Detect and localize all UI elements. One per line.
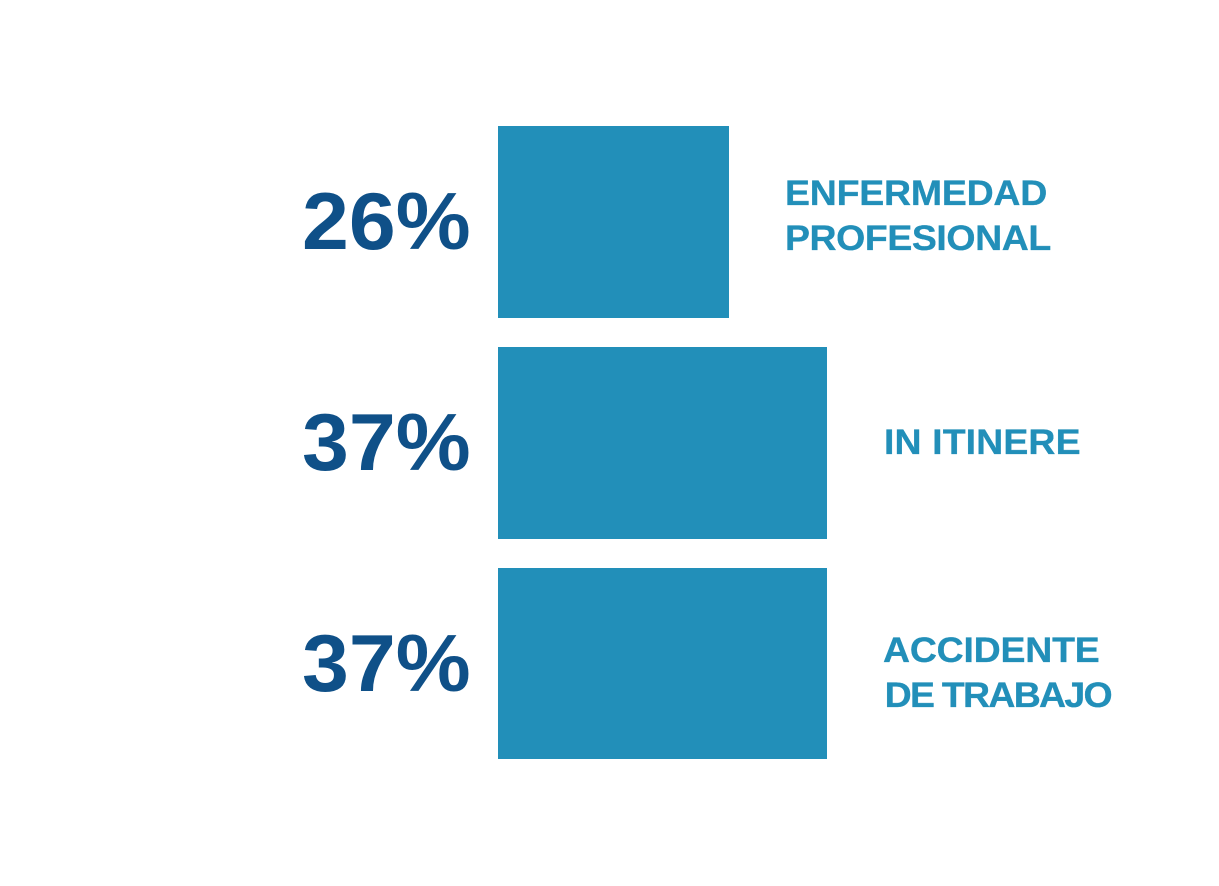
bar 37% accidente de trabajo	[498, 568, 827, 759]
row: accidente de trabajo	[302, 568, 1112, 759]
percentage 37% in itinere: 37%	[302, 398, 471, 488]
bar 37% in itinere	[498, 347, 827, 539]
label accidente de trabajo	[883, 631, 1112, 714]
percentage 37% accidente de trabajo: 37%	[302, 619, 471, 709]
label enfermedad profesional: ENFERMEDAD	[785, 174, 1047, 213]
label in itinere: IN ITINERE	[884, 423, 1081, 462]
row: in itinere	[302, 347, 1081, 539]
label accidente de trabajo: ACCIDENTE	[883, 631, 1100, 670]
label enfermedad profesional	[785, 174, 1051, 258]
label enfermedad profesional: PROFESIONAL	[785, 218, 1051, 258]
bar 26%	[498, 126, 729, 318]
row: enfermedad profesional	[302, 126, 1051, 318]
percentage 26%: 26%	[302, 177, 471, 267]
label accidente de trabajo: DE TRABAJO	[885, 676, 1111, 714]
